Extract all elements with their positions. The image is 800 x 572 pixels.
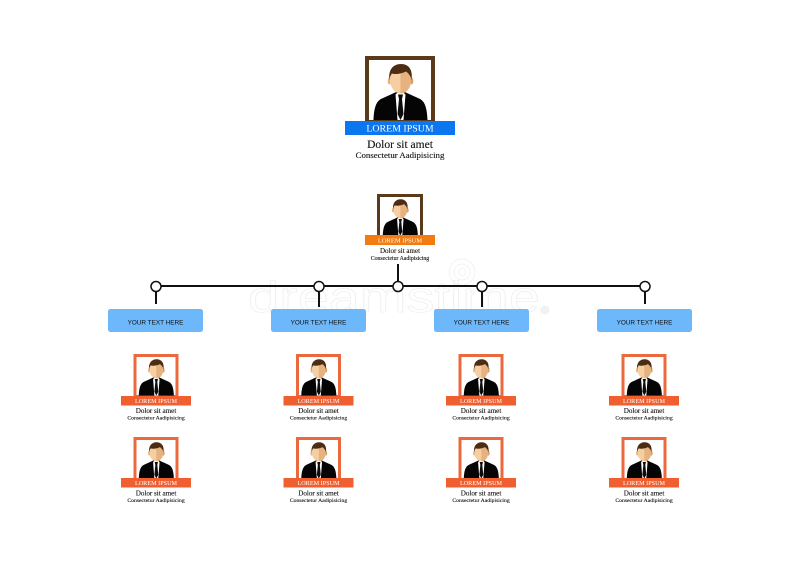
second-level portrait frame [378, 196, 422, 238]
staff card: column 1 row 2: Dolor sit amet [136, 490, 176, 498]
staff card: column 1 row 1: Dolor sit amet [136, 407, 176, 415]
staff card: column 4 row 2: Dolor sit amet [624, 490, 664, 498]
second-level caption [371, 247, 429, 262]
department box 4: YOUR TEXT HERE [617, 320, 672, 326]
staff card: column 3 row 1: Consectetur Aadipisicing [452, 416, 510, 422]
staff card: column 2 row 1 [284, 356, 354, 422]
department box 2 [271, 309, 366, 332]
staff card: column 4 row 2: LOREM IPSUM [623, 480, 666, 487]
staff card: column 4 row 1: Dolor sit amet [624, 407, 664, 415]
department box 2: YOUR TEXT HERE [291, 320, 346, 326]
staff card: column 2 row 1: LOREM IPSUM [297, 398, 340, 405]
staff card: column 4 row 1: LOREM IPSUM [623, 398, 666, 405]
top executive card [345, 58, 455, 160]
staff card: column 1 row 1: Consectetur Aadipisicing [127, 416, 185, 422]
department box 3 [434, 309, 529, 332]
top portrait frame [367, 58, 433, 122]
top caption [356, 139, 445, 160]
second-level caption: Dolor sit amet [380, 247, 420, 255]
staff card: column 3 row 2: LOREM IPSUM [460, 480, 503, 487]
staff card: column 1 row 2 [121, 438, 191, 504]
top caption: Dolor sit amet [367, 139, 434, 151]
staff card: column 1 row 2: LOREM IPSUM [135, 480, 178, 487]
second-level caption: Consectetur Aadipisicing [371, 256, 429, 262]
connector lines [151, 264, 650, 307]
staff card: column 1 row 1 [121, 356, 191, 422]
staff card: column 2 row 2: Consectetur Aadipisicing [290, 498, 347, 504]
department box 1: YOUR TEXT HERE [128, 320, 183, 326]
staff card: column 3 row 1: Dolor sit amet [461, 407, 501, 415]
second-level card [365, 196, 435, 262]
staff card: column 3 row 1 [446, 356, 516, 422]
staff card: column 3 row 2 [446, 438, 516, 504]
department box 4 [597, 309, 692, 332]
staff card: column 4 row 1 [609, 356, 679, 422]
staff card: column 2 row 2: LOREM IPSUM [297, 480, 340, 487]
department box 3: YOUR TEXT HERE [454, 320, 509, 326]
staff card: column 3 row 2: Dolor sit amet [461, 490, 501, 498]
staff card: column 2 row 1: Consectetur Aadipisicing [290, 416, 347, 422]
top name band: LOREM IPSUM [366, 124, 434, 134]
staff card: column 2 row 2: Dolor sit amet [298, 490, 339, 498]
staff card: column 3 row 2: Consectetur Aadipisicing [452, 498, 510, 504]
top caption: Consectetur Aadipisicing [356, 150, 445, 160]
watermark: dreamstime [248, 273, 540, 322]
staff card: column 1 row 2: Consectetur Aadipisicing [127, 498, 185, 504]
department box 1 [108, 309, 203, 332]
staff card: column 3 row 1: LOREM IPSUM [460, 398, 503, 405]
second-level name band: LOREM IPSUM [378, 238, 422, 244]
staff card: column 1 row 1: LOREM IPSUM [135, 398, 178, 405]
staff card: column 4 row 2 [609, 438, 679, 504]
watermark [248, 259, 549, 322]
staff card: column 4 row 2: Consectetur Aadipisicing [615, 498, 673, 504]
staff card: column 2 row 2 [284, 438, 354, 504]
staff card: column 2 row 1: Dolor sit amet [298, 407, 339, 415]
staff card: column 4 row 1: Consectetur Aadipisicing [615, 416, 673, 422]
